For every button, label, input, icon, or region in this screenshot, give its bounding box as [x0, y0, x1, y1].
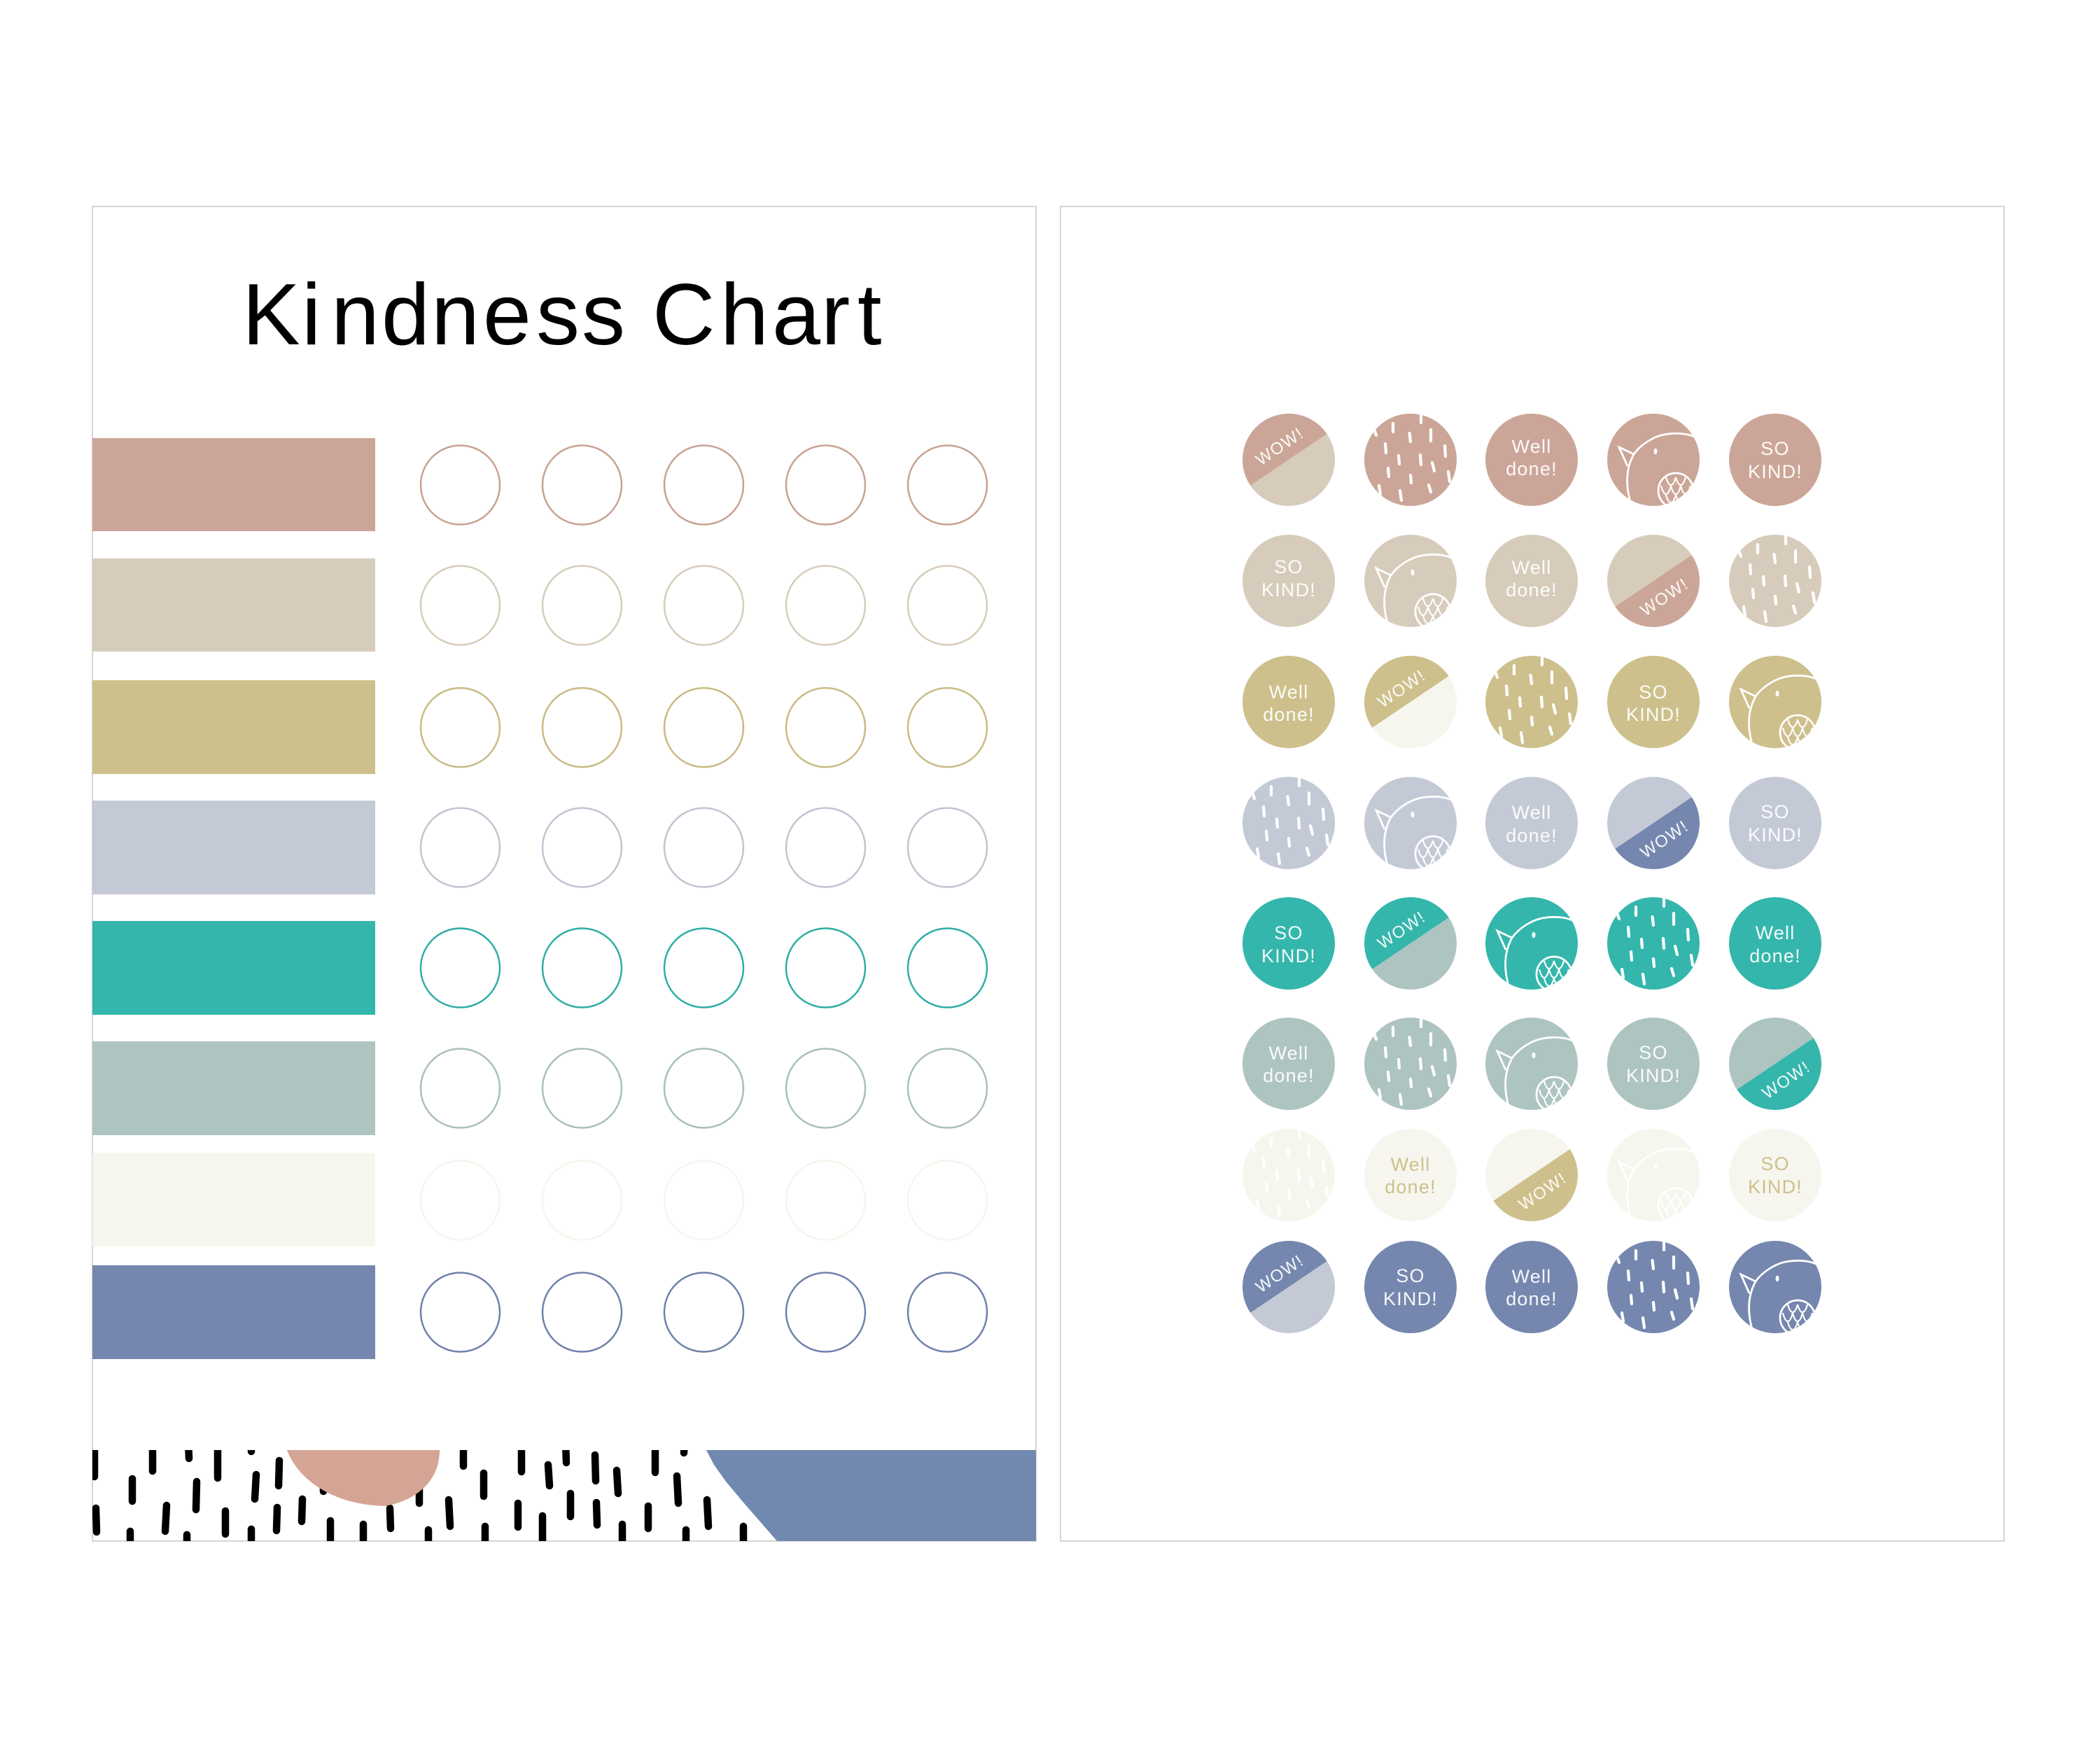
sticker: SO KIND: KIND! — [1626, 704, 1681, 725]
rose semicircle shape — [287, 1450, 440, 1506]
sticker: SO KIND: KIND! — [1748, 461, 1802, 482]
sticker: WOW — [1589, 759, 1718, 887]
decorative footer band — [92, 1450, 1036, 1541]
row 4: grey bar and circles — [92, 801, 987, 894]
sticker row 7: cream — [1242, 1111, 1821, 1239]
sticker: WOW — [1346, 879, 1475, 1008]
sticker: bird — [1485, 897, 1578, 992]
sticker: SO KIND: SO — [1639, 682, 1668, 703]
sticker: tick pattern — [1242, 1126, 1335, 1221]
sticker row 5: teal — [1242, 879, 1821, 1008]
sticker: WOW: WOW! — [1374, 908, 1429, 953]
row 5: teal bar and circles — [92, 921, 987, 1015]
sticker: Well done: Well — [1391, 1154, 1430, 1175]
row 6: sage bar and circles — [92, 1041, 987, 1135]
sticker row 6: sage — [1242, 999, 1840, 1128]
sticker: Well done: Well — [1756, 922, 1795, 943]
sticker: SO KIND: SO — [1760, 1153, 1790, 1174]
sticker row 4: grey — [1242, 759, 1821, 887]
sticker: bird — [1485, 1018, 1578, 1112]
sticker: Well done: Well — [1512, 802, 1551, 823]
sticker row 2: beige — [1242, 516, 1821, 645]
sticker: WOW: WOW! — [1637, 575, 1692, 620]
sticker: SO KIND: SO — [1274, 556, 1303, 577]
sticker: Well done: done! — [1749, 945, 1801, 966]
sticker: WOW — [1346, 638, 1475, 766]
sticker: SO KIND: KIND! — [1383, 1288, 1438, 1309]
panel: sticker sheet page — [1060, 206, 2004, 1541]
sticker: SO KIND — [1242, 897, 1335, 990]
sticker row 8: blue — [1224, 1223, 1821, 1351]
sticker: tick pattern — [1364, 1015, 1457, 1110]
sticker: bird — [1607, 414, 1700, 508]
sticker: SO KIND: SO — [1396, 1265, 1425, 1286]
sticker: WOW — [1467, 1111, 1596, 1239]
sticker: SO KIND: SO — [1639, 1042, 1668, 1063]
sticker: Well done: done! — [1385, 1176, 1436, 1197]
sticker: tick pattern — [1242, 774, 1335, 869]
sticker: WOW: WOW! — [1252, 424, 1308, 470]
sticker: Well done — [1729, 897, 1821, 990]
row 2: beige bar and circles — [92, 558, 987, 652]
sticker: WOW: WOW! — [1374, 666, 1429, 712]
row 7: cream bar and circles — [92, 1153, 987, 1246]
sticker: SO KIND — [1607, 1018, 1700, 1110]
sticker: Well done: Well — [1512, 557, 1551, 578]
sticker: Well done: done! — [1506, 1288, 1558, 1309]
sticker: SO KIND — [1242, 535, 1335, 627]
sticker: SO KIND — [1729, 777, 1821, 869]
sticker: tick pattern — [1607, 1238, 1700, 1333]
blue corner shape — [706, 1450, 1036, 1541]
sticker: bird — [1364, 535, 1457, 629]
sticker: SO KIND: KIND! — [1748, 824, 1802, 845]
sticker: Well done — [1485, 535, 1578, 627]
sticker: bird — [1364, 777, 1457, 871]
sticker: Well done — [1485, 1241, 1578, 1333]
sticker: tick pattern — [1607, 894, 1700, 990]
sticker: tick pattern — [1485, 653, 1578, 748]
row 1: rose bar and circles — [92, 438, 987, 531]
sticker: WOW: WOW! — [1516, 1169, 1570, 1214]
sticker row 3: olive — [1242, 638, 1821, 766]
sticker: Well done — [1485, 777, 1578, 869]
row 3: olive bar and circles — [92, 680, 987, 774]
sticker: SO KIND — [1607, 656, 1700, 748]
sticker: Well done: Well — [1512, 436, 1551, 457]
sticker: Well done: done! — [1263, 704, 1315, 725]
sticker: Well done: done! — [1263, 1065, 1315, 1086]
sticker: WOW — [1224, 395, 1353, 524]
sticker: SO KIND — [1729, 1129, 1821, 1221]
sticker: SO KIND: SO — [1274, 922, 1303, 943]
sticker: Well done: Well — [1269, 682, 1308, 703]
sticker: WOW — [1589, 516, 1718, 645]
sticker: bird — [1729, 1241, 1821, 1335]
sticker: Well done: Well — [1512, 1266, 1551, 1287]
sticker: Well done: Well — [1269, 1043, 1308, 1064]
sticker: SO KIND: KIND! — [1626, 1065, 1681, 1086]
sticker: bird — [1729, 656, 1821, 750]
sticker: SO KIND: KIND! — [1748, 1176, 1802, 1197]
sticker: SO KIND: SO — [1760, 438, 1790, 459]
sticker row 1: rose — [1224, 395, 1821, 524]
sticker: SO KIND: SO — [1760, 801, 1790, 822]
title: Kindness Chart — [242, 267, 881, 363]
row 8: blue bar and circles — [92, 1265, 987, 1359]
sticker: Well done — [1242, 1018, 1335, 1110]
sticker: WOW: WOW! — [1637, 817, 1692, 862]
sticker: SO KIND: KIND! — [1261, 945, 1316, 966]
sticker: SO KIND: KIND! — [1261, 579, 1316, 600]
sticker: WOW — [1711, 999, 1840, 1128]
sticker: SO KIND — [1729, 414, 1821, 506]
sticker: Well done — [1364, 1129, 1457, 1221]
sticker: Well done: done! — [1506, 458, 1558, 479]
sticker: WOW: WOW! — [1759, 1057, 1814, 1103]
sticker: Well done — [1242, 656, 1335, 748]
sticker: WOW: WOW! — [1252, 1251, 1308, 1297]
sticker: Well done: done! — [1506, 579, 1558, 600]
sticker: Well done: done! — [1506, 825, 1558, 846]
sticker: tick pattern — [1364, 411, 1457, 506]
sticker: tick pattern — [1729, 532, 1821, 627]
sticker: WOW — [1224, 1223, 1353, 1351]
sticker: Well done — [1485, 414, 1578, 506]
sticker: bird — [1607, 1129, 1700, 1223]
panel: kindness chart page — [92, 206, 1036, 1547]
sticker: SO KIND — [1364, 1241, 1457, 1333]
